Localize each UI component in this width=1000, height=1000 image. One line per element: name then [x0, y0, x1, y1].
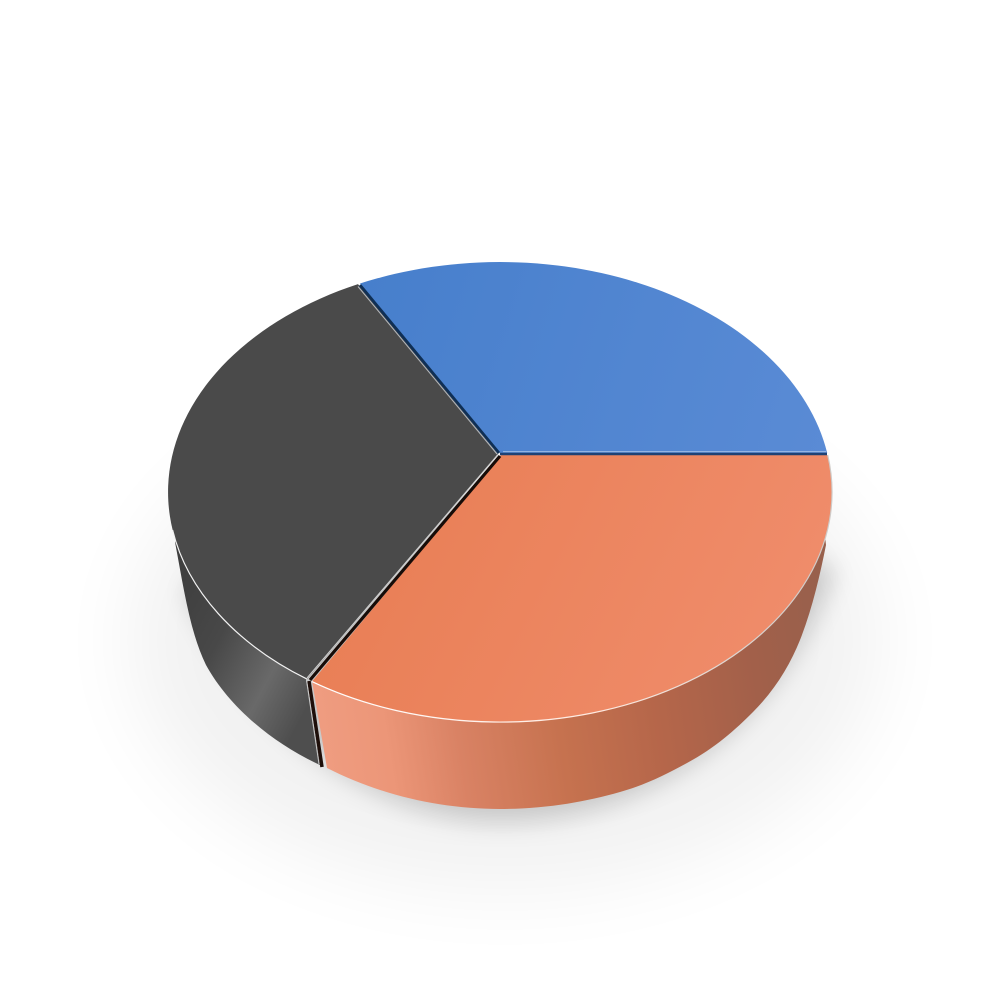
slice: dark grey: [168, 284, 498, 679]
vertical seam between side walls: [306, 680, 322, 767]
rim highlight: dark segment: [173, 530, 307, 679]
seam: blue and orange: [500, 452, 827, 454]
rim highlight: orange segment: [312, 455, 832, 722]
side wall: orange segment: [312, 490, 826, 809]
slice: orange: [312, 455, 832, 722]
seam: blue and dark: [358, 285, 499, 454]
slice: blue: [360, 262, 827, 453]
seam: dark and orange: [307, 455, 500, 680]
side wall: dark segment: [175, 500, 400, 765]
drop shadow: [130, 390, 880, 890]
